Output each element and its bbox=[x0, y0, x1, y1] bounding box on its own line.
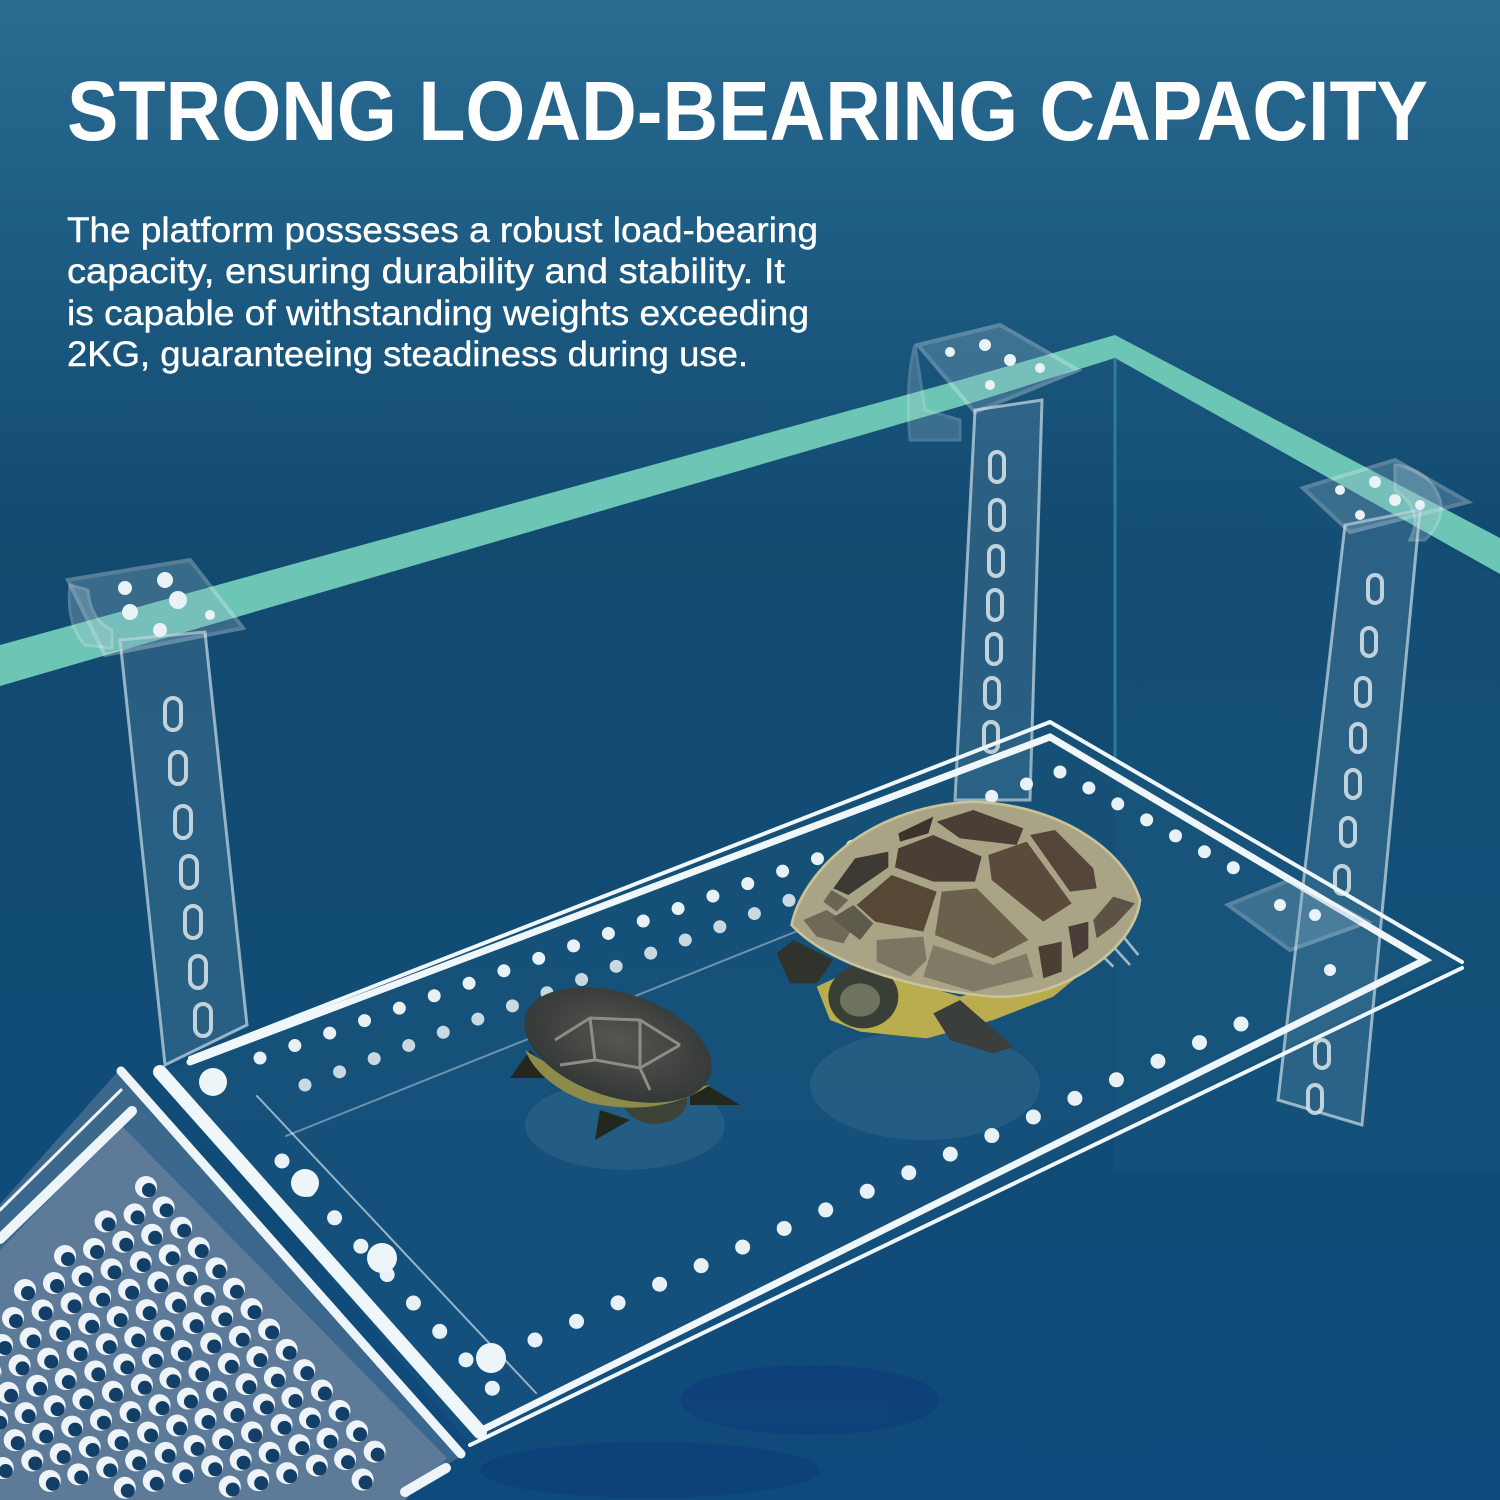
shell scutes bbox=[803, 810, 1135, 992]
tank glass rim bbox=[0, 335, 1500, 760]
description bbox=[67, 211, 818, 374]
rear support leg bbox=[955, 400, 1042, 800]
tank back wall bbox=[1115, 355, 1500, 1170]
description: 2KG, guaranteeing steadiness during use. bbox=[67, 335, 748, 374]
claws bbox=[1100, 937, 1138, 967]
large pegs bbox=[199, 1068, 506, 1373]
rear clamp bbox=[908, 325, 1078, 440]
head bbox=[828, 965, 898, 1028]
left clamp bbox=[68, 560, 243, 655]
small turtle reflection bbox=[525, 1080, 725, 1170]
legs bbox=[777, 940, 833, 983]
description: is capable of withstanding weights exceeding bbox=[67, 294, 809, 333]
plastron bbox=[817, 963, 1093, 1038]
platform bbox=[160, 722, 1462, 1445]
right support leg bbox=[1278, 510, 1420, 1125]
shell bbox=[792, 802, 1140, 997]
description: The platform possesses a robust load-bearing bbox=[67, 211, 818, 250]
right clamp bbox=[1303, 460, 1468, 540]
large turtle reflection bbox=[810, 1030, 1040, 1140]
left support leg bbox=[120, 632, 247, 1065]
small turtle bbox=[510, 966, 740, 1140]
description: capacity, ensuring durability and stability. It bbox=[67, 252, 785, 291]
ramp bbox=[0, 1068, 464, 1500]
ramp hole grid bbox=[0, 1187, 378, 1491]
front right clamp bbox=[1228, 880, 1368, 976]
water reflections bbox=[20, 1365, 940, 1498]
platform pegs bbox=[260, 772, 1250, 1389]
large turtle bbox=[777, 802, 1140, 1053]
